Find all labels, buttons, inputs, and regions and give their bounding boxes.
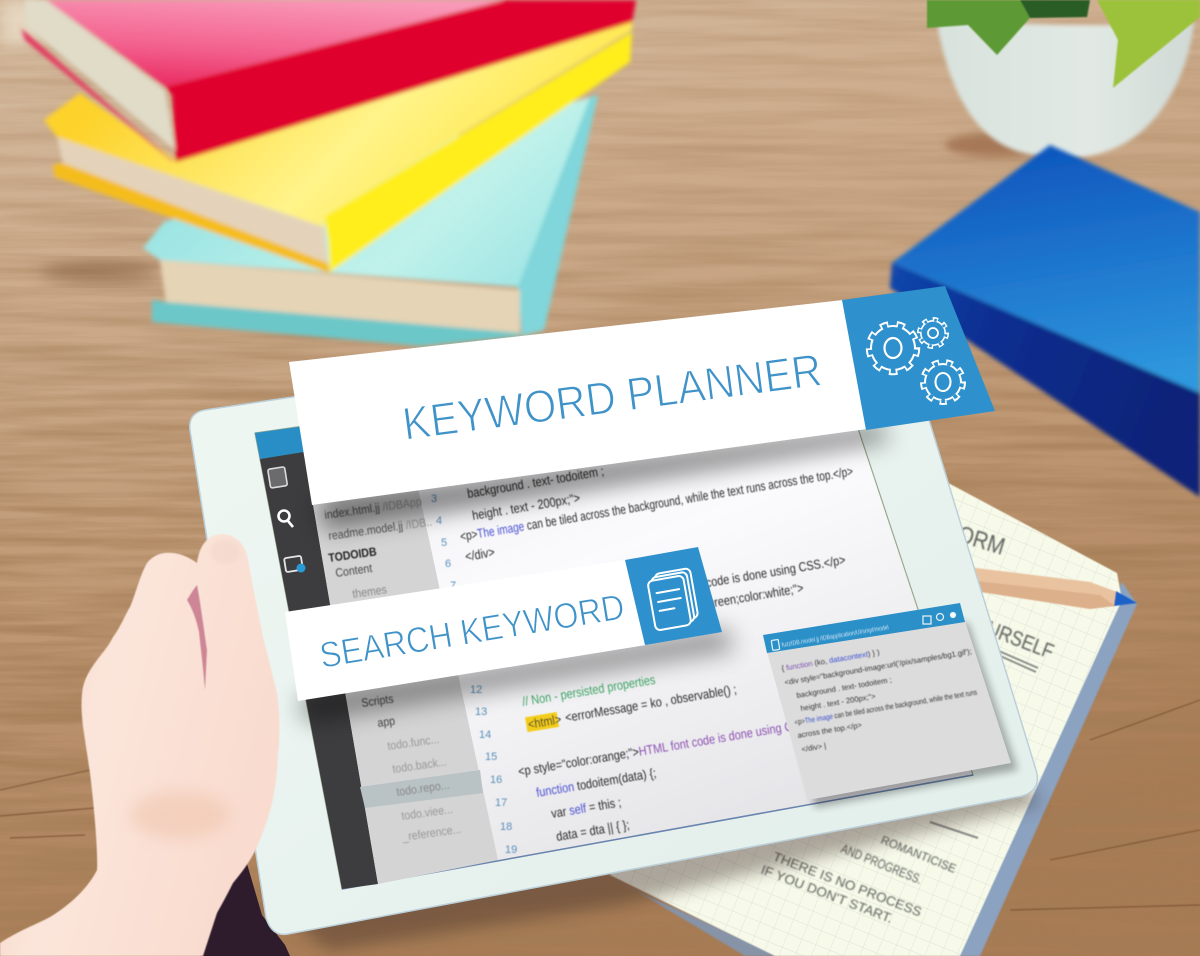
code lines: <errorMessage = ko , observable() ;: [564, 682, 738, 725]
window code: across the top.</p>: [797, 720, 863, 740]
code lines: background . text- todoitem ;: [466, 463, 605, 501]
icon: gears: [868, 318, 964, 403]
tablet body: [190, 310, 1037, 934]
line numbers: 18: [500, 821, 512, 833]
screen bottom dark edge: [342, 775, 973, 889]
file names: themes: [352, 584, 388, 601]
heading: search keyword: SEARCH KEYWORD: [317, 586, 627, 676]
window code: background . text- todoitem ;: [796, 675, 892, 700]
highlighted file row: [360, 770, 483, 808]
window header icons: [771, 612, 956, 650]
sidebar icon: window: [284, 556, 306, 572]
sidebar icon: note: [268, 467, 287, 488]
thumb nail: [211, 540, 241, 564]
file names: app: [377, 715, 396, 730]
handwriting: IF YOU DON'T START.: [759, 862, 895, 926]
notebook with handwriting: [608, 477, 1137, 956]
handwriting: THERE IS NO PROCESS: [771, 849, 924, 920]
handwriting: [759, 521, 1057, 926]
gear medium: [922, 361, 964, 403]
code lines: <p>The image can be tiled across the background, while the text runs across the top.</p>: [459, 463, 854, 544]
leaves: [927, 0, 1200, 88]
file names: Scripts: [361, 693, 395, 710]
pot: [936, 18, 1194, 158]
line numbers: 13: [475, 706, 487, 718]
popup code window: [763, 603, 1018, 808]
file names: todo.back...: [392, 756, 447, 776]
handwriting: ORM: [954, 521, 1008, 561]
banner shadow: [300, 628, 735, 722]
file names: Content: [335, 562, 374, 580]
book: teal: [143, 95, 598, 346]
handwriting: AND PROGRESS.: [839, 841, 924, 887]
file names: todo.viee...: [401, 803, 454, 823]
handwriting: ROMANTICISE: [879, 833, 958, 876]
line numbers: 14: [479, 729, 491, 741]
banner white strip: [289, 300, 867, 505]
code lines: var self = this ;: [550, 795, 622, 821]
window code: [781, 647, 978, 754]
banner white strip: [285, 560, 646, 701]
banner: keyword planner: [289, 286, 995, 530]
hand holding the tablet: [0, 534, 279, 956]
window body: [767, 621, 1011, 800]
stack of books: [21, 0, 636, 346]
line numbers: 16: [490, 774, 502, 786]
file names: _reference...: [401, 823, 462, 844]
code lines: height . text - 200px;">: [471, 490, 581, 523]
line numbers: 15: [485, 751, 497, 763]
book: yellow: [44, 13, 632, 272]
file names: TODOIDB: [328, 546, 377, 565]
banner blue block: [842, 286, 995, 430]
window code: </div> |: [801, 741, 827, 754]
line numbers: 17: [495, 797, 507, 809]
banner: search keyword: [285, 547, 735, 722]
code lines: data = dta || { };: [555, 817, 630, 844]
file names: index.html.jj /IDBApp: [324, 496, 422, 522]
line numbers: 4: [436, 515, 442, 527]
icon: documents: [646, 568, 699, 631]
screen top bar: [255, 426, 309, 459]
code lines: background-color:green;color:white;">: [621, 580, 805, 626]
heading: keyword planner: KEYWORD PLANNER: [400, 343, 825, 450]
file names: todo.func...: [387, 733, 440, 753]
window header: [763, 603, 965, 653]
code lines: function todoitem(data) {;: [535, 765, 657, 800]
file names: readme.model.jj /IDB..: [328, 516, 433, 543]
handwriting: URSELF: [983, 617, 1057, 664]
line numbers: [431, 493, 517, 856]
window code: <p>The image can be tiled across the background, while the text runs: [794, 688, 978, 727]
gear small: [918, 318, 948, 348]
file names: [324, 496, 462, 844]
book: red: [21, 0, 636, 162]
tablet: [190, 310, 1037, 934]
html highlight tag: <html>: [527, 712, 562, 732]
tablet screen: [255, 350, 973, 889]
code lines: <p style="color:orange;">HTML font code is done using CSS: [517, 716, 808, 779]
banner blue block: [625, 547, 722, 645]
banner shadow: [318, 425, 890, 530]
plant pot with leaves: [927, 0, 1200, 158]
file panel: [304, 437, 498, 884]
line numbers: 3: [431, 493, 437, 505]
blue book: [890, 145, 1200, 497]
pencil: [968, 567, 1137, 609]
wrist shading: [130, 791, 230, 839]
code lines: </div>: [464, 544, 496, 564]
popup code window: fuzzIDB.model.jj /IDBapplication/UI/smpl/model: [781, 625, 889, 649]
line numbers: 6: [445, 558, 451, 570]
file names: todo.repo...: [396, 779, 450, 799]
sidebar icon: search: [278, 510, 293, 527]
window code: height . text - 200px;">: [800, 691, 877, 713]
code lines: [459, 463, 854, 844]
line numbers: 7: [450, 580, 456, 592]
line numbers: 5: [441, 537, 447, 549]
line numbers: 19: [505, 844, 517, 856]
code lines: HTML font code is done using CSS.</p>: [652, 552, 847, 599]
line numbers: 12: [470, 684, 482, 696]
gear large: [868, 323, 918, 373]
code lines: // Non - persisted properties: [521, 672, 656, 709]
finger gap shadow: [187, 585, 207, 690]
tablet shadow: [200, 760, 1040, 956]
window code: <div style="background-image:url('/pix/samples/bg1.gif');: [784, 647, 972, 687]
dark sidebar: [260, 452, 378, 889]
window code: { function (ko, datacontext) } ): [781, 648, 881, 673]
